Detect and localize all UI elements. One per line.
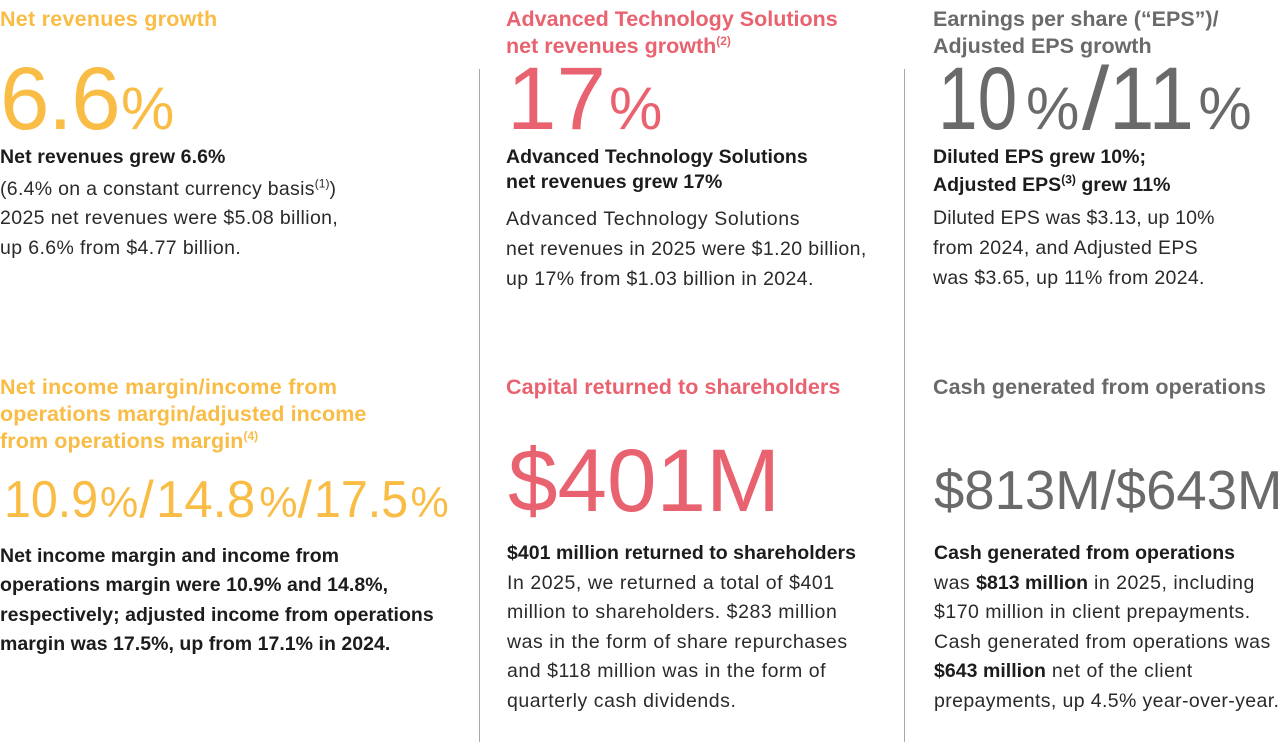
text: capital returned: and $118 million was in the form of bbox=[507, 660, 826, 682]
stat: margins: 14.8 bbox=[156, 471, 255, 529]
stat: 6.6% bbox=[0, 48, 174, 148]
stat: 17% bbox=[507, 48, 662, 148]
stat: margins: 17.5 bbox=[314, 471, 409, 529]
stat: 17%: 17 bbox=[507, 48, 606, 148]
text: net revenues: up 6.6% from $4.77 billion. bbox=[0, 236, 241, 258]
stat: EPS bbox=[938, 48, 1252, 148]
text: capital returned: In 2025, we returned a total of $401 bbox=[507, 572, 835, 594]
heading: capital returned: Capital returned to shareholders bbox=[506, 375, 840, 399]
stat: EPS: % % bbox=[1026, 75, 1252, 142]
text: margins: margin was 17.5%, up from 17.1% in 2024. bbox=[0, 633, 390, 655]
text: ATS: net revenues grew 17% bbox=[506, 171, 722, 193]
text: margins: Net income margin and income from bbox=[0, 544, 339, 566]
text: margins: operations margin were 10.9% and 14.8%, bbox=[0, 574, 388, 596]
text: ATS: Advanced Technology Solutions bbox=[506, 146, 808, 168]
heading: cash generated: Cash generated from operations bbox=[933, 375, 1266, 399]
text: margins bbox=[0, 544, 434, 655]
text: EPS bbox=[933, 146, 1215, 288]
stat: EPS: 11 bbox=[1109, 48, 1194, 148]
heading: margins: operations margin/adjusted income bbox=[0, 402, 366, 426]
text: cash: Cash generated from operations was bbox=[934, 630, 1271, 652]
heading: net revenues growth: Net revenues growth bbox=[0, 7, 217, 31]
text: EPS: from 2024, and Adjusted EPS bbox=[933, 237, 1198, 259]
text: cash: was $813 million in 2025, including bbox=[934, 572, 1255, 594]
text: ATS bbox=[506, 146, 867, 290]
stat: 6.6%: 6.6 bbox=[0, 48, 119, 148]
stat: margins: / bbox=[139, 471, 154, 529]
text: net revenues: 2025 net revenues were $5.08 billion, bbox=[0, 207, 338, 229]
text: capital returned: quarterly cash dividends. bbox=[507, 690, 736, 712]
text: cash: Cash generated from operations bbox=[934, 542, 1235, 564]
text: EPS: Adjusted EPS(3) grew 11% bbox=[933, 172, 1170, 196]
heading: margins: Net income margin/income from bbox=[0, 375, 337, 399]
stat: 17%: % bbox=[609, 75, 662, 142]
text: ATS: Advanced Technology Solutions bbox=[506, 208, 800, 230]
stat: EPS: / bbox=[1082, 48, 1110, 148]
text: cash: $643 million net of the client bbox=[934, 660, 1193, 682]
text: EPS: Diluted EPS grew 10%; bbox=[933, 146, 1146, 168]
stat: margins: 10.9 bbox=[4, 471, 98, 529]
text: EPS: Diluted EPS was $3.13, up 10% bbox=[933, 207, 1215, 229]
heading: ATS growth: Advanced Technology Solutions bbox=[506, 7, 838, 31]
text: EPS: was $3.65, up 11% from 2024. bbox=[933, 266, 1205, 288]
stat: $401M: $401M bbox=[508, 430, 780, 530]
heading: margins bbox=[0, 375, 366, 453]
text: cash bbox=[934, 542, 1279, 712]
stat: EPS: 10 bbox=[938, 48, 1017, 148]
stat: margins: / bbox=[297, 471, 312, 529]
text: cash: prepayments, up 4.5% year-over-year. bbox=[934, 690, 1279, 712]
heading: margins: from operations margin(4) bbox=[0, 429, 258, 453]
text: capital returned bbox=[507, 542, 856, 712]
stat: margins: % % % bbox=[100, 479, 449, 527]
text: margins: respectively; adjusted income from operations bbox=[0, 604, 434, 626]
text: cash: $170 million in client prepayments. bbox=[934, 601, 1251, 623]
heading: ATS growth: net revenues growth(2) bbox=[506, 34, 731, 58]
text: net revenues: Net revenues grew 6.6% bbox=[0, 146, 225, 168]
text: ATS: net revenues in 2025 were $1.20 billion, bbox=[506, 238, 867, 260]
stat: cash: $813M/$643M bbox=[934, 460, 1282, 521]
text: capital returned: $401 million returned to shareholders bbox=[507, 542, 856, 564]
heading: EPS growth: Adjusted EPS growth bbox=[933, 34, 1152, 58]
stat: 6.6%: % bbox=[121, 75, 174, 142]
stat: margins bbox=[4, 471, 449, 529]
text: capital returned: was in the form of share repurchases bbox=[507, 630, 848, 652]
heading: EPS growth: Earnings per share (“EPS”)/ bbox=[933, 7, 1219, 31]
text: capital returned: million to shareholders. $283 million bbox=[507, 601, 837, 623]
text: net revenues bbox=[0, 146, 338, 258]
heading: ATS growth bbox=[506, 7, 838, 58]
text: net revenues: (6.4% on a constant currency basis(1)) bbox=[0, 176, 336, 200]
heading: EPS growth bbox=[933, 7, 1219, 58]
text: ATS: up 17% from $1.03 billion in 2024. bbox=[506, 268, 814, 290]
